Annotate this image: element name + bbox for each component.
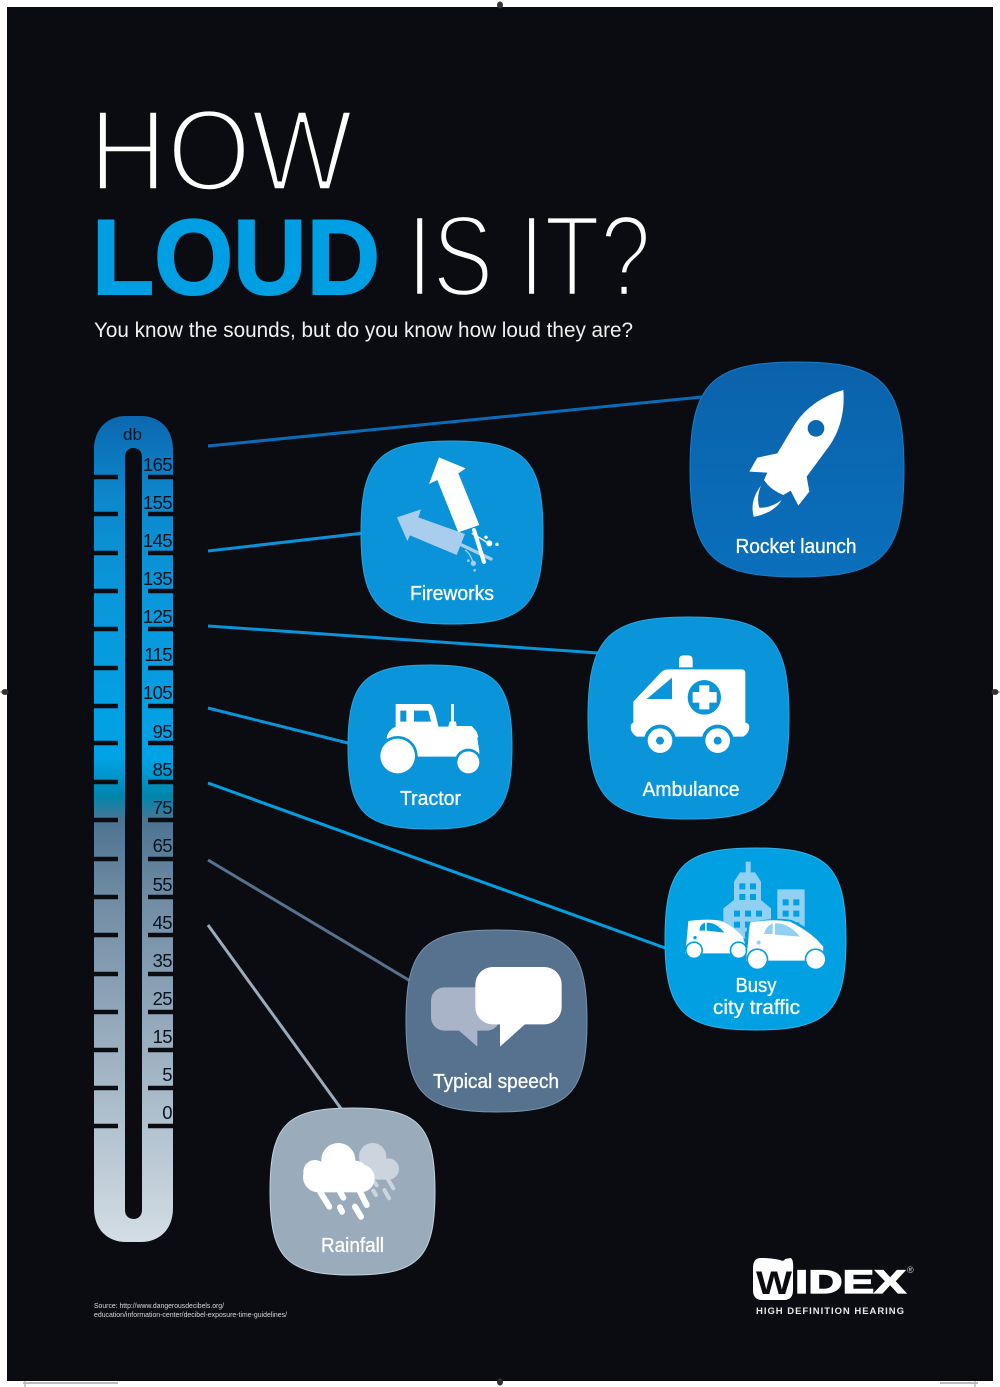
scale numbers: 85: [153, 759, 172, 780]
thermometer body: [94, 416, 173, 1242]
panel: tractor: [348, 665, 512, 829]
scale numbers: 35: [153, 950, 172, 971]
connector: tractor: [208, 708, 352, 744]
title line: LOUD IS IT?: IS IT?: [407, 191, 651, 321]
connector: busy city traffic: [208, 783, 668, 949]
title line: LOUD IS IT?: LOUD: [92, 197, 380, 317]
icon: speech bubbles: [431, 967, 562, 1047]
title: [89, 86, 651, 321]
logo: Widex: W: [756, 1265, 793, 1301]
logo wordmark: IDEX: [795, 1264, 907, 1300]
scale numbers: 135: [143, 568, 172, 589]
scale numbers: 45: [153, 912, 172, 933]
label: Typical speech: [433, 1071, 559, 1093]
logo badge: [753, 1258, 793, 1300]
panel: ambulance: [588, 617, 789, 819]
label: Tractor: [400, 788, 461, 810]
scale numbers: 0: [162, 1102, 172, 1123]
panel: typical speech: [406, 930, 587, 1112]
source note: [94, 1301, 288, 1319]
label: Ambulance: [642, 779, 740, 801]
connector: fireworks: [208, 533, 364, 551]
tagline: HIGH DEFINITION HEARING: [756, 1306, 904, 1317]
connector: rainfall: [208, 925, 342, 1110]
panel: busy city traffic: [665, 848, 846, 1030]
scale numbers: 115: [144, 644, 172, 665]
connector: rocket launch: [208, 397, 702, 446]
scale numbers: 155: [143, 492, 172, 513]
connector: typical speech: [208, 860, 412, 982]
panel: rocket launch: [690, 362, 904, 577]
icon: city and cars: [683, 862, 827, 970]
scale numbers: 125: [143, 606, 172, 627]
scale numbers: 5: [162, 1064, 172, 1085]
title line: HOW: HOW: [89, 86, 353, 216]
scale numbers: 65: [153, 835, 172, 856]
decibel thermometer: [94, 416, 173, 1242]
scale numbers: 55: [153, 874, 172, 895]
icon: tractor: [378, 704, 482, 776]
subtitle: You know the sounds, but do you know how loud they are?: [94, 319, 633, 342]
label: Busy: [736, 975, 776, 997]
scale numbers: 15: [153, 1026, 172, 1047]
label: Rainfall: [321, 1235, 384, 1257]
scale numbers: 145: [143, 530, 172, 551]
label: [713, 975, 800, 1019]
scale numbers: 165: [143, 454, 172, 475]
panel: fireworks: [361, 441, 543, 624]
panel: rainfall: [270, 1108, 435, 1275]
scale numbers: 75: [153, 797, 172, 818]
icon: fireworks rockets: [397, 457, 499, 572]
label: Rocket launch: [736, 536, 856, 558]
icon: ambulance: [630, 655, 750, 757]
label: Fireworks: [410, 583, 494, 605]
icon: rain clouds: [303, 1143, 399, 1217]
scale numbers: 105: [143, 682, 172, 703]
unit label: db: [123, 425, 142, 444]
connector: ambulance: [208, 626, 599, 653]
label: city traffic: [713, 997, 800, 1019]
source note: Source: http://www.dangerousdecibels.org/: [94, 1301, 225, 1310]
logo: Widex: [753, 1258, 914, 1317]
scale numbers: 95: [153, 721, 172, 742]
scale numbers: 25: [153, 988, 172, 1009]
source note: education/information-center/decibel-exposure-time-guidelines/: [94, 1310, 288, 1319]
scale numbers: [143, 454, 172, 1123]
registered mark: ®: [907, 1265, 914, 1275]
icon: rocket: [749, 390, 844, 517]
title line: LOUD IS IT?: [92, 191, 651, 321]
